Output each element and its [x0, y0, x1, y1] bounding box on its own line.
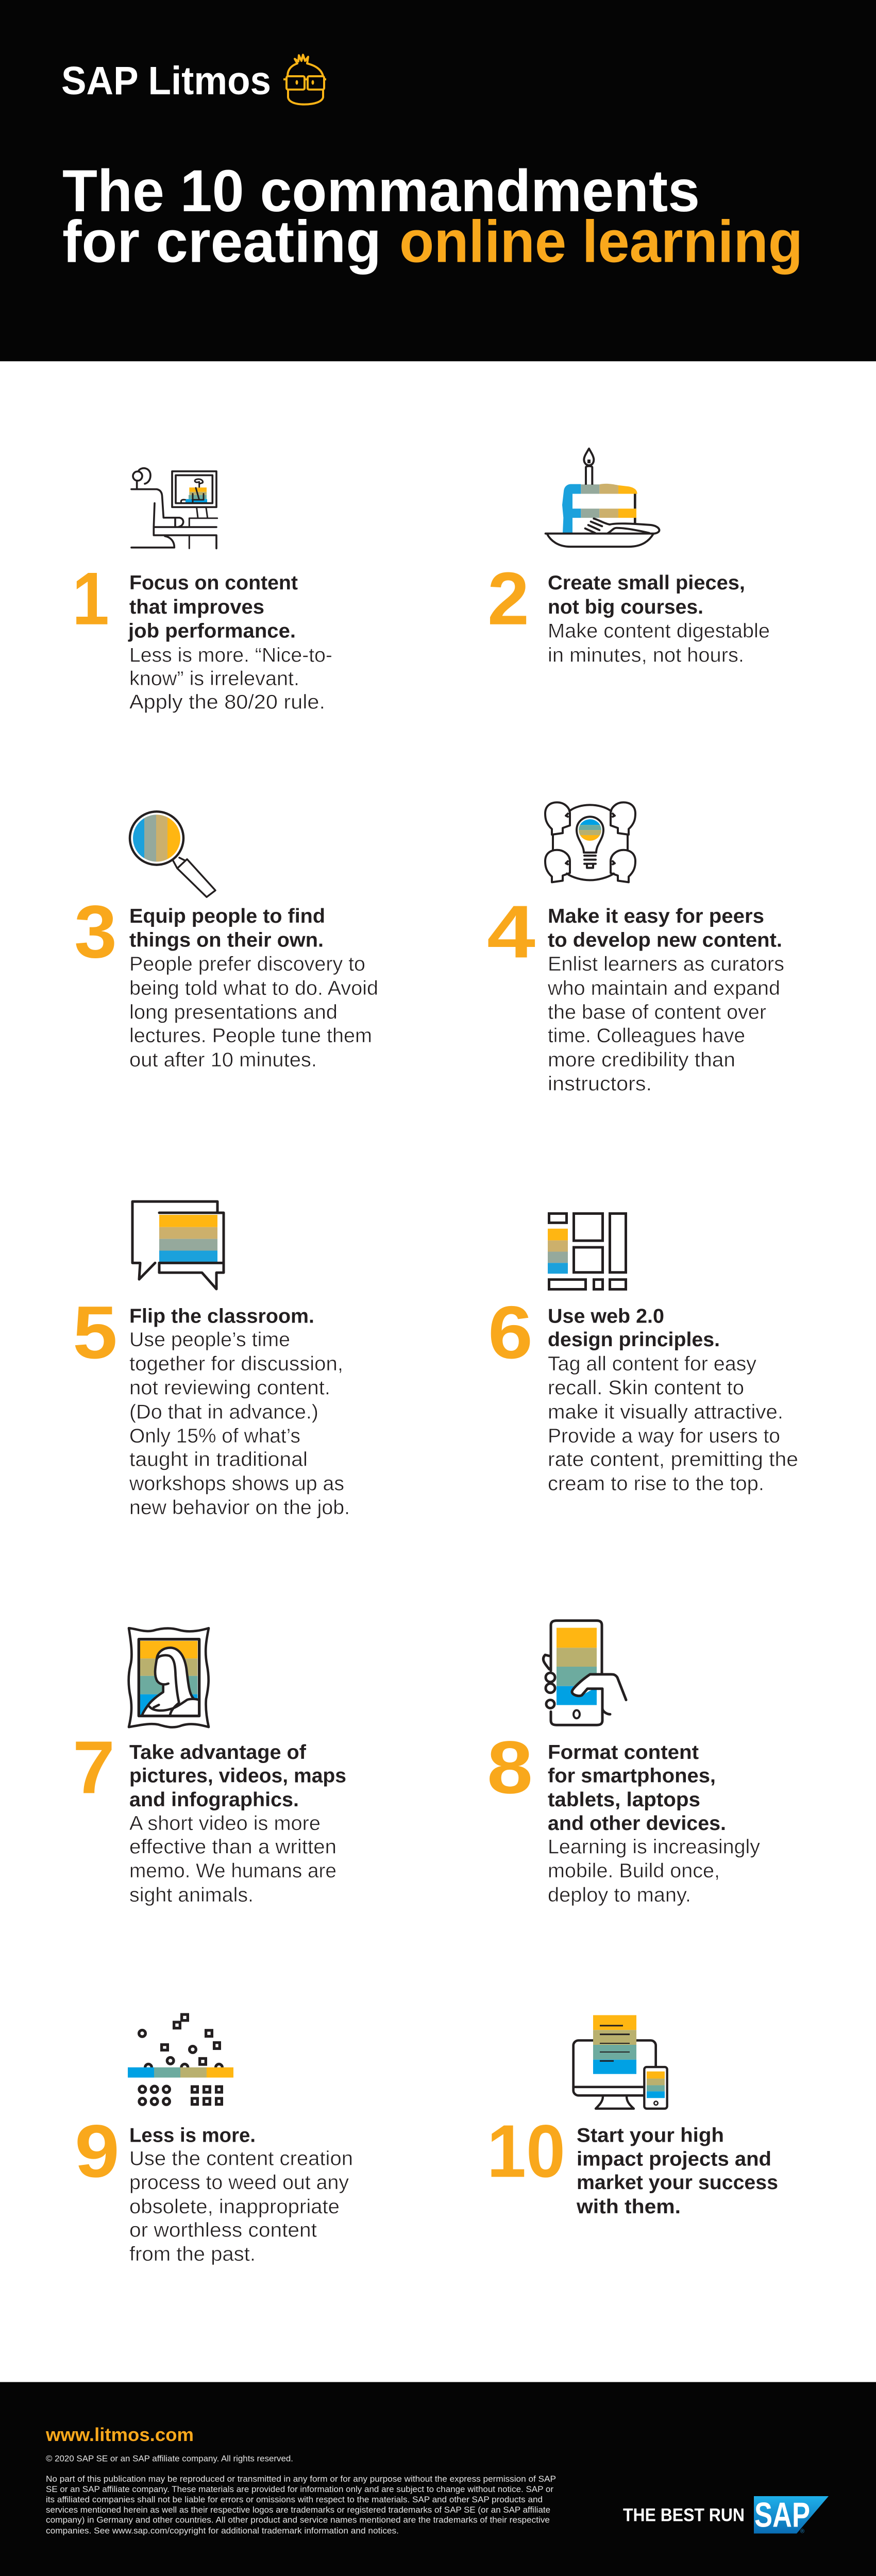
heading and body text 3: long presentations and	[129, 1002, 338, 1024]
heading and body text 6: Use web 2.0	[548, 1306, 664, 1328]
heading and body text 8: Learning is increasingly	[548, 1836, 761, 1858]
heading and body text 5: Use people’s time	[129, 1329, 290, 1351]
icon: framed portrait	[129, 1628, 209, 1727]
legal notice: its affiliated companies shall not be liable for errors or omissions with respect to the materials. SAP and other SAP products and	[46, 2495, 543, 2504]
heading and body text 8	[548, 1741, 761, 1906]
legal notice: company) in Germany and other countries. All other product and service names mentioned are the trademarks of their respective	[46, 2515, 550, 2525]
commandment 4	[487, 802, 784, 1095]
commandment 9	[75, 2014, 353, 2265]
heading text 10: Start your high	[577, 2125, 724, 2147]
commandment 6	[488, 1213, 798, 1495]
number 1: 1	[72, 556, 109, 640]
commandment 7	[73, 1628, 346, 1906]
number 8: 8	[487, 1725, 533, 1809]
heading and body text 9	[129, 2125, 353, 2265]
heading and body text 5: (Do that in advance.)	[129, 1401, 318, 1423]
heading and body text 7: Take advantage of	[129, 1741, 307, 1764]
logo: The Best Run SAP: SAP	[754, 2496, 810, 2535]
heading text 10: market your success	[577, 2172, 778, 2194]
header panel	[0, 0, 876, 361]
heading and body text 6: recall. Skin content to	[548, 1377, 744, 1399]
heading and body text 8: and other devices.	[548, 1812, 726, 1835]
title: online learning	[399, 209, 803, 275]
logo: The Best Run SAP: ®	[800, 2529, 804, 2535]
heading and body text 6	[548, 1306, 798, 1495]
heading and body text 2: Create small pieces,	[548, 572, 745, 594]
legal notice	[46, 2474, 556, 2536]
heading and body text 1: Less is more. “Nice-to-	[129, 644, 332, 666]
heading and body text 1: that improves	[129, 596, 264, 618]
heading and body text 4: instructors.	[548, 1073, 652, 1095]
heading and body text 7: and infographics.	[129, 1789, 299, 1811]
heading and body text 9: Use the content creation	[129, 2148, 353, 2170]
logo: SAP Litmos: SAP Litmos	[61, 59, 271, 103]
heading and body text 9: or worthless content	[129, 2219, 317, 2241]
title: The 10 commandments	[62, 158, 700, 224]
heading and body text 3	[129, 905, 378, 1071]
number 3: 3	[74, 890, 117, 973]
icon: monitor and phone showing content	[574, 2015, 667, 2109]
commandment 8	[487, 1621, 761, 1906]
commandment 3	[74, 811, 378, 1071]
heading and body text 3: lectures. People tune them	[129, 1025, 372, 1047]
icon: Litmos face with glasses	[283, 55, 326, 105]
icon: web page layout blocks	[548, 1213, 626, 1289]
number 5: 5	[73, 1291, 117, 1374]
heading and body text 2: Make content digestable	[548, 620, 770, 642]
number 7: 7	[73, 1725, 115, 1809]
heading and body text 9: from the past.	[129, 2243, 256, 2265]
heading and body text 8: for smartphones,	[548, 1765, 716, 1787]
number 10: 10	[487, 2109, 565, 2193]
legal notice: SE or an SAP affiliate company. These materials are provided for information only and are subject to change without notice. SAP or	[46, 2484, 553, 2494]
title: for creating	[62, 209, 381, 275]
heading and body text 7: pictures, videos, maps	[129, 1765, 346, 1787]
heading and body text 8: tablets, laptops	[548, 1789, 700, 1811]
number 6: 6	[488, 1291, 533, 1374]
commandment 10	[487, 2015, 778, 2218]
icon: slice of cake with fork	[546, 449, 659, 547]
heading and body text 7: effective than a written	[129, 1836, 336, 1858]
number 2: 2	[487, 556, 529, 640]
heading and body text 7	[129, 1741, 346, 1906]
heading and body text 4: more credibility than	[548, 1049, 735, 1071]
heading and body text 6: rate content, premitting the	[548, 1449, 798, 1471]
heading and body text 6: Provide a way for users to	[548, 1425, 780, 1447]
heading text 10	[576, 2125, 778, 2218]
heading and body text 7: memo. We humans are	[129, 1860, 336, 1882]
heading and body text 4: Enlist learners as curators	[548, 953, 784, 975]
heading and body text 5: together for discussion,	[129, 1353, 343, 1375]
heading and body text 9: Less is more.	[129, 2125, 256, 2147]
heading and body text 1	[128, 572, 332, 714]
icon: falling shapes sorted through a filter	[128, 2014, 233, 2105]
heading and body text 5: workshops shows up as	[129, 1472, 344, 1495]
heading and body text 4: to develop new content.	[548, 929, 782, 951]
heading and body text 8: Format content	[548, 1741, 699, 1764]
icon: person at computer	[131, 468, 217, 548]
legal notice: No part of this publication may be reproduced or transmitted in any form or for any purpose without the express permission of SAP	[46, 2474, 556, 2484]
heading and body text 3: People prefer discovery to	[129, 953, 365, 975]
heading and body text 7: A short video is more	[129, 1812, 321, 1835]
heading and body text 5: not reviewing content.	[129, 1377, 330, 1399]
logo: The Best Run SAP: THE BEST RUN	[623, 2505, 745, 2526]
heading and body text 4: who maintain and expand	[547, 977, 780, 999]
heading and body text 6: make it visually attractive.	[548, 1401, 783, 1423]
heading text 10: impact projects and	[577, 2148, 771, 2170]
footer panel	[0, 2382, 876, 2576]
heading and body text 6: cream to rise to the top.	[548, 1472, 764, 1495]
legal notice: companies. See www.sap.com/copyright for additional trademark information and notices.	[46, 2526, 399, 2536]
heading and body text 9: process to weed out any	[129, 2172, 349, 2194]
heading and body text 8: deploy to many.	[548, 1884, 691, 1906]
heading text 10: with them.	[576, 2196, 681, 2218]
heading and body text 8: mobile. Build once,	[548, 1860, 720, 1882]
heading and body text 3: Equip people to find	[129, 905, 325, 927]
legal notice: services mentioned herein as well as their respective logos are trademarks or registered trademarks of SAP SE (or an SAP affiliate	[46, 2505, 550, 2515]
heading and body text 5: Flip the classroom.	[129, 1306, 314, 1328]
heading and body text 7: sight animals.	[129, 1884, 254, 1906]
heading and body text 6: Tag all content for easy	[548, 1353, 757, 1375]
heading and body text 6: design principles.	[548, 1329, 720, 1351]
heading and body text 1: know” is irrelevant.	[129, 668, 299, 690]
heading and body text 4: Make it easy for peers	[548, 905, 764, 927]
heading and body text 5: new behavior on the job.	[129, 1497, 350, 1519]
commandment 2	[487, 449, 770, 666]
heading and body text 2: not big courses.	[548, 596, 703, 618]
website link: www.litmos.com	[45, 2425, 194, 2445]
icon: hand holding smartphone	[543, 1621, 634, 1725]
heading and body text 3: being told what to do. Avoid	[129, 977, 378, 999]
heading and body text 1: Focus on content	[129, 572, 298, 594]
heading and body text 5	[129, 1306, 350, 1519]
heading and body text 4: the base of content over	[548, 1002, 766, 1024]
heading and body text 2: in minutes, not hours.	[548, 644, 744, 666]
heading and body text 9: obsolete, inappropriate	[129, 2196, 340, 2218]
heading and body text 4	[547, 905, 784, 1095]
title	[62, 158, 803, 275]
heading and body text 1: Apply the 80/20 rule.	[129, 691, 325, 714]
number 4: 4	[487, 890, 535, 973]
heading and body text 5: Only 15% of what’s	[129, 1425, 300, 1447]
heading and body text 2	[548, 572, 770, 666]
commandment 5	[73, 1201, 350, 1519]
heading and body text 3: out after 10 minutes.	[129, 1049, 317, 1071]
number 9: 9	[75, 2109, 120, 2193]
copyright line: © 2020 SAP SE or an SAP affiliate company. All rights reserved.	[46, 2454, 293, 2463]
heading and body text 5: taught in traditional	[129, 1449, 308, 1471]
heading and body text 3: things on their own.	[129, 929, 324, 951]
commandment 1	[72, 468, 332, 714]
icon: four heads around a light bulb	[545, 802, 635, 882]
icon: overlapping speech bubbles	[132, 1201, 224, 1289]
icon: magnifying glass	[130, 811, 215, 897]
logo: The Best Run SAP	[623, 2496, 829, 2535]
heading and body text 4: time. Colleagues have	[548, 1025, 745, 1047]
heading and body text 1: job performance.	[128, 620, 296, 642]
